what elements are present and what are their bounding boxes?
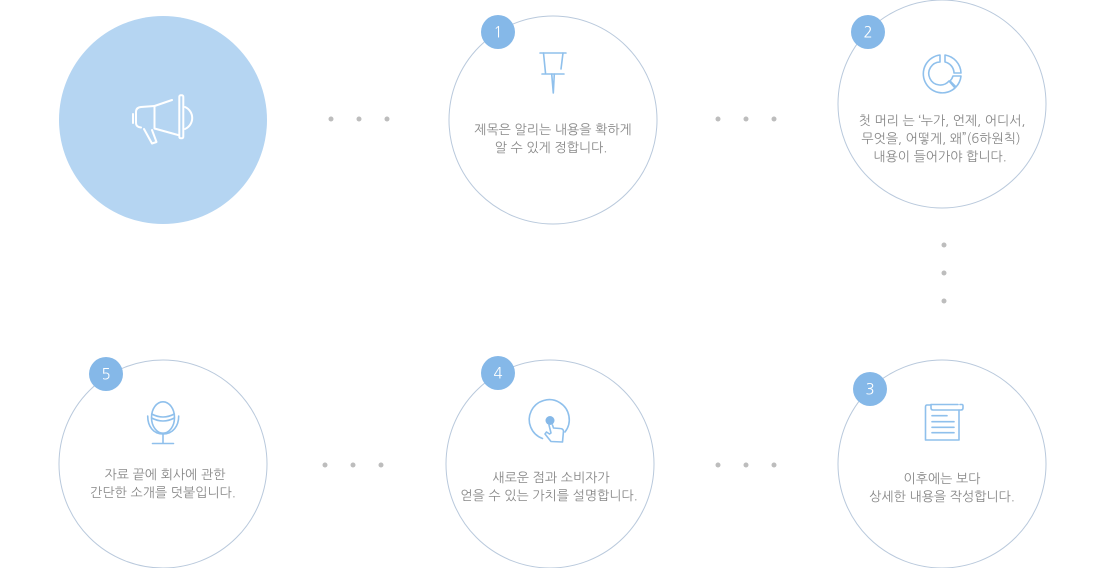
badge: 2: 2 bbox=[863, 26, 873, 40]
badge: 2 bbox=[851, 15, 885, 49]
text: step 4: 새로운 점과 소비자가 bbox=[492, 471, 610, 484]
text: step 2: 첫 머리 는 ‘누가, 언제, 어디서, bbox=[859, 114, 1025, 127]
text: step 5: 자료 끝에 회사에 관한 bbox=[105, 468, 225, 481]
icon: donut chart bbox=[923, 55, 961, 93]
icon: microphone bbox=[148, 402, 179, 444]
badge: 3: 3 bbox=[865, 382, 875, 398]
connector dots: step 3 to step 4 bbox=[716, 462, 776, 468]
connector dots: step 4 to step 5 bbox=[322, 462, 384, 468]
panel: intro megaphone circle bbox=[59, 16, 267, 224]
panel: step 5 bbox=[59, 357, 267, 568]
icon: push pin bbox=[540, 53, 566, 93]
badge: 4 bbox=[481, 356, 515, 390]
icon: megaphone bbox=[133, 95, 192, 144]
panel: step 3 bbox=[838, 360, 1046, 568]
badge: 1 bbox=[481, 15, 515, 49]
badge: 5: 5 bbox=[101, 368, 111, 382]
connector dots: step 1 to step 2 bbox=[716, 116, 776, 122]
text: step 1: 제목은 알리는 내용을 확하게 bbox=[474, 123, 632, 136]
text: step 1: 알 수 있게 정합니다. bbox=[495, 141, 607, 154]
text: step 3: 이후에는 보다 bbox=[904, 472, 980, 485]
connector dots: step 2 to step 3 bbox=[942, 242, 946, 304]
text: step 2: 무엇을, 어떻게, 왜”(6하원칙) bbox=[861, 132, 1021, 145]
panel: step 1 bbox=[449, 15, 657, 224]
icon: document bbox=[926, 404, 963, 440]
panel: step 4 bbox=[446, 356, 654, 568]
connector dots: intro to step 1 bbox=[328, 116, 390, 122]
badge: 4: 4 bbox=[493, 366, 503, 382]
badge: 5 bbox=[89, 357, 123, 391]
panel: step 2 bbox=[838, 0, 1046, 208]
icon: touch bbox=[529, 400, 569, 442]
text: step 3: 상세한 내용을 작성합니다. bbox=[869, 490, 1015, 503]
text: step 4: 얻을 수 있는 가치를 설명합니다. bbox=[460, 489, 638, 502]
badge: 3 bbox=[853, 372, 887, 406]
text: step 2: 내용이 들어가야 합니다. bbox=[873, 150, 1007, 163]
badge: 1: 1 bbox=[493, 26, 503, 40]
text: step 5: 간단한 소개를 덧붙입니다. bbox=[90, 486, 236, 499]
